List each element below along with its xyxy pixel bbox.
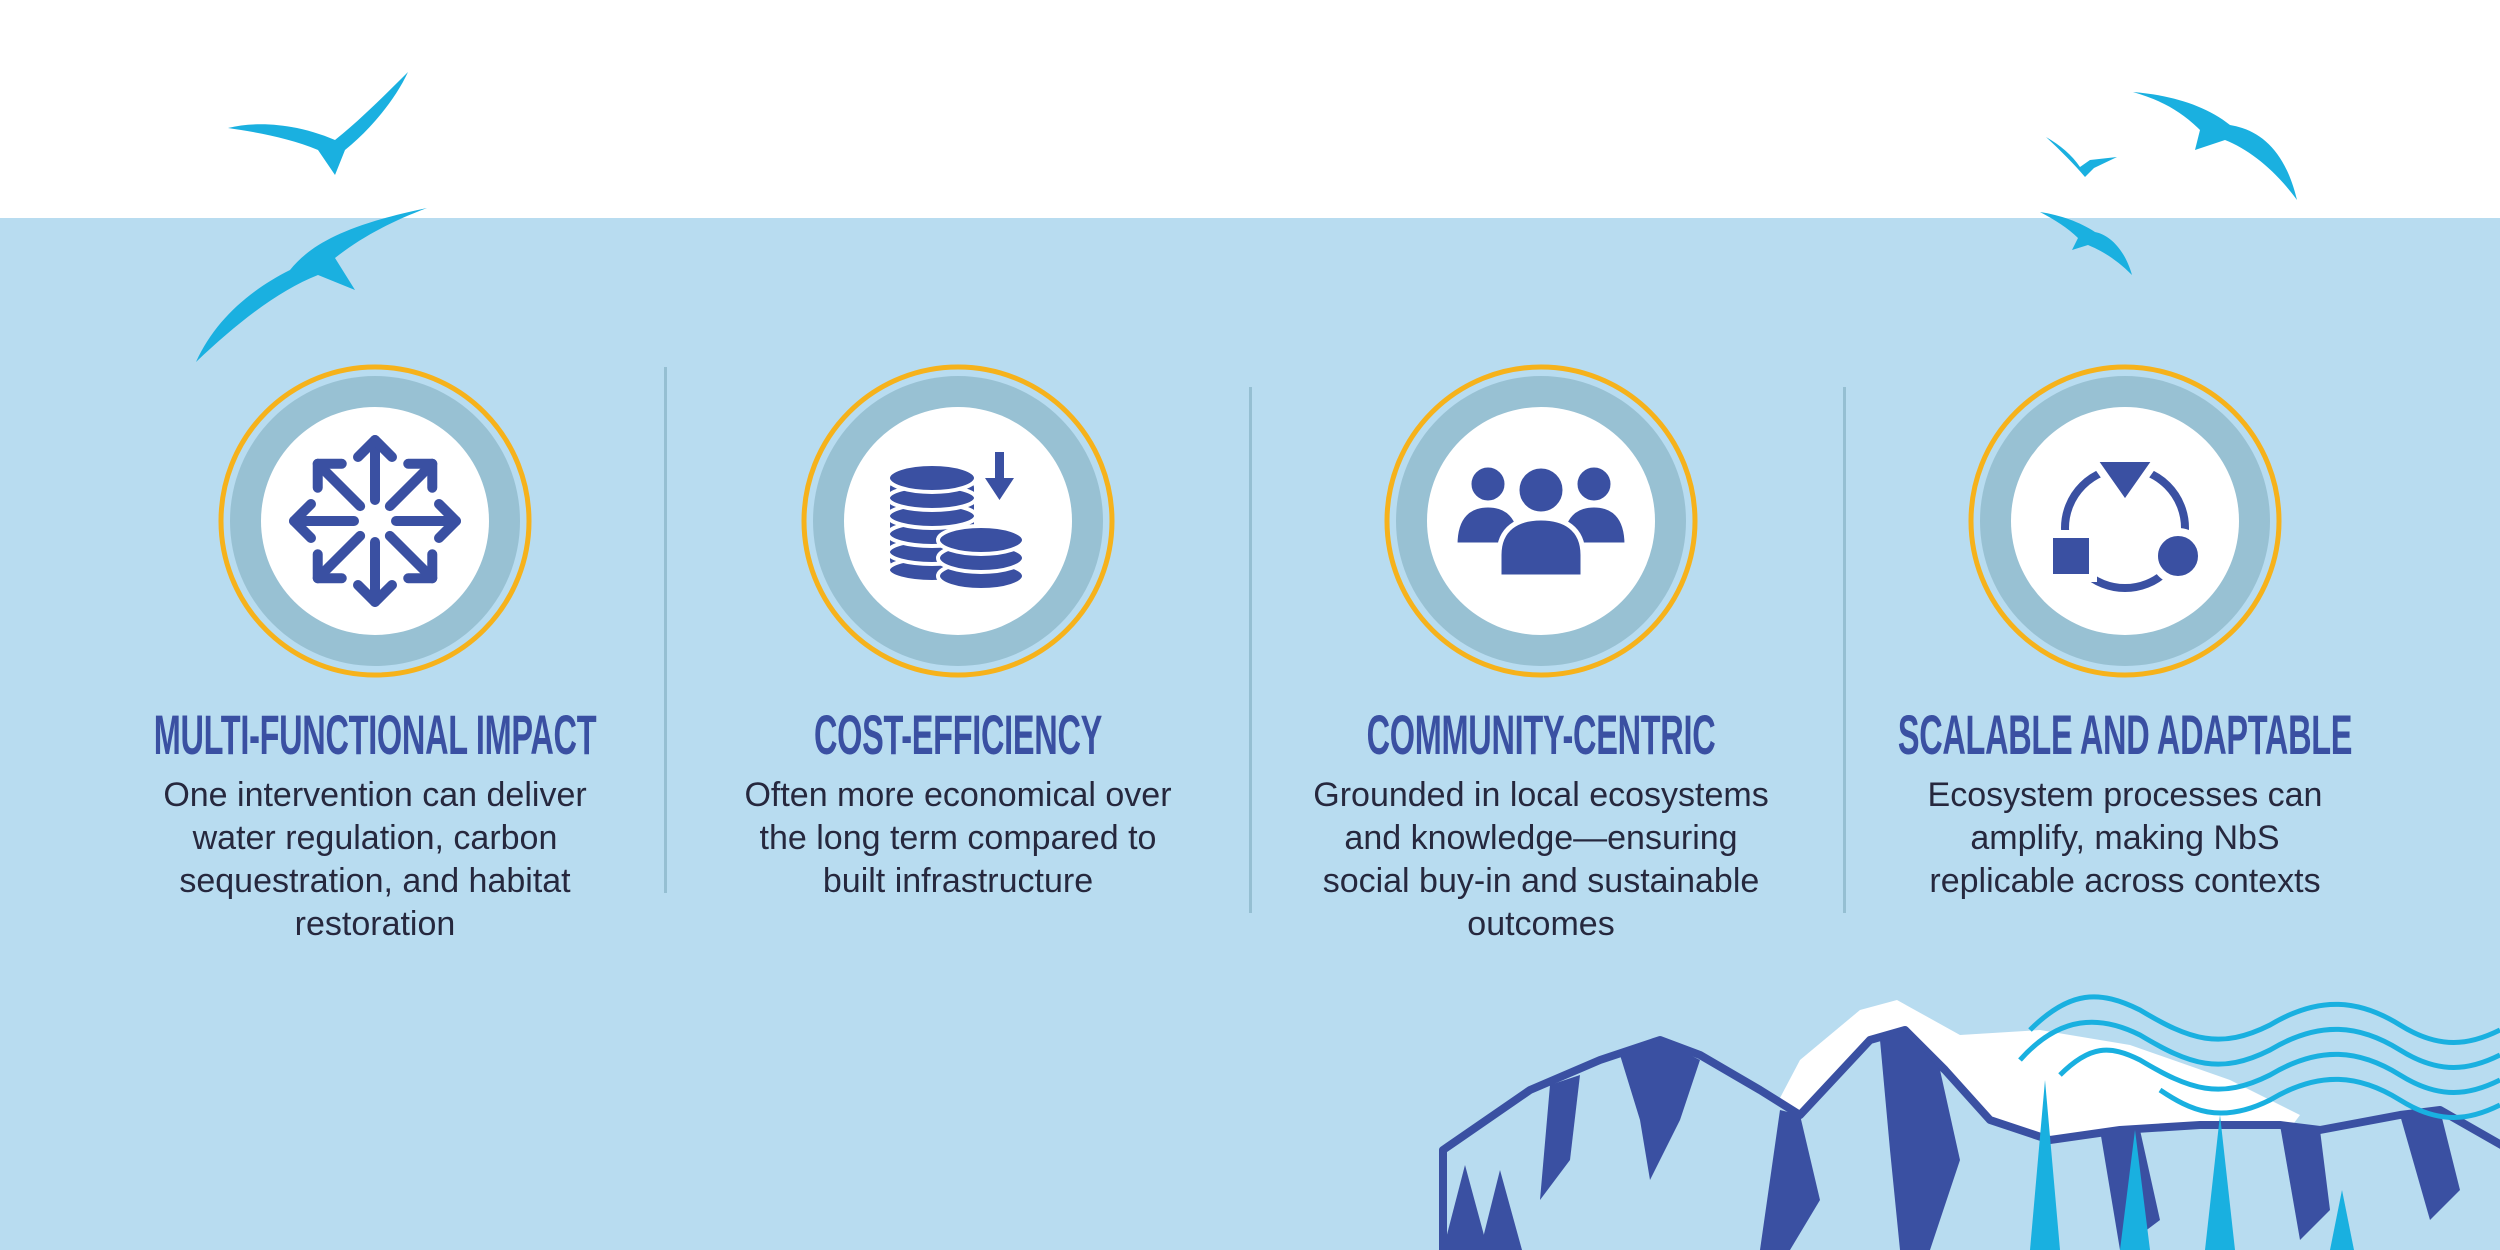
text block: the long term compared to — [760, 819, 1156, 857]
icon circle: multi-functional — [221, 367, 529, 675]
heading: MULTI-FUNCTIONAL IMPACT — [154, 703, 596, 766]
heading: SCALABLE AND ADAPTABLE — [1898, 703, 2352, 766]
panel: multi-functional impact — [154, 703, 596, 943]
icon circle: cost efficiency — [804, 367, 1112, 675]
panel: scalable and adaptable — [1898, 703, 2352, 900]
text block: built infrastructure — [823, 862, 1093, 900]
waves — [2020, 997, 2500, 1118]
panel: cost-efficiency — [744, 703, 1172, 900]
heading: COST-EFFICIENCY — [814, 703, 1102, 766]
mountains — [1443, 1000, 2500, 1250]
heading: COMMUNITY-CENTRIC — [1367, 703, 1715, 766]
text block: outcomes — [1467, 905, 1615, 943]
text block: replicable across contexts — [1929, 862, 2321, 900]
icon circle: community — [1387, 367, 1695, 675]
text block — [1928, 776, 2322, 900]
panel: community-centric — [1313, 703, 1769, 943]
text block: sequestration, and habitat — [179, 862, 571, 900]
text block: One intervention can deliver — [163, 776, 587, 814]
text block: and knowledge—ensuring — [1344, 819, 1738, 857]
bird: top left — [228, 72, 408, 175]
text block: social buy-in and sustainable — [1323, 862, 1759, 900]
bird: right large — [2133, 92, 2297, 200]
text block: restoration — [295, 905, 455, 943]
text block — [163, 776, 587, 943]
icon circle: scalable — [1971, 367, 2279, 675]
text block: water regulation, carbon — [193, 819, 557, 857]
text block: Often more economical over — [744, 776, 1172, 814]
text block: Ecosystem processes can — [1928, 776, 2322, 814]
bird: right lower — [2040, 212, 2132, 275]
bird: left lower — [196, 208, 427, 362]
text block — [1313, 776, 1769, 943]
text block: amplify, making NbS — [1970, 819, 2280, 857]
text block — [744, 776, 1172, 900]
bird: right small — [2046, 137, 2117, 177]
text block: Grounded in local ecosystems — [1313, 776, 1769, 814]
